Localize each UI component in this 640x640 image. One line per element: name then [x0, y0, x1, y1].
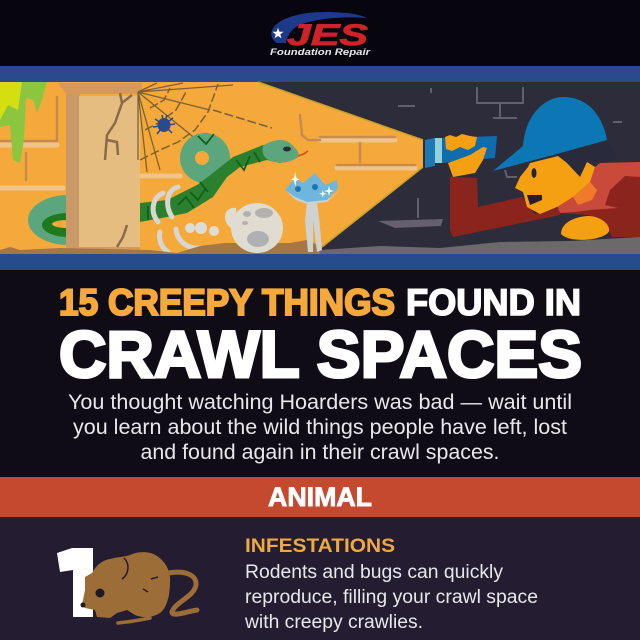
- wooden support post: [58, 83, 142, 251]
- body text: reproduce, filling your crawl space: [245, 587, 538, 608]
- worker collar: [573, 182, 597, 205]
- worker shirt highlight: [557, 162, 640, 213]
- snake tail behind post: [28, 195, 108, 245]
- body text: Rodents and bugs can quickly: [245, 562, 504, 583]
- scene: faint bricks in the dark: [398, 87, 622, 218]
- worker gripping fingers: [445, 134, 477, 151]
- scene: lit bricks: [0, 97, 415, 188]
- worker lower hand: [561, 216, 609, 240]
- banner: bottom blue band: [0, 254, 640, 270]
- banner: top blue band: [0, 66, 640, 82]
- worker shirt: [557, 162, 640, 237]
- scene: stone ledge in the dark: [378, 219, 443, 228]
- illustration banner: [0, 66, 640, 270]
- worker mouth: [527, 195, 542, 205]
- flashlight: [425, 136, 497, 168]
- skull: [225, 203, 283, 253]
- intro text: you learn about the wild things people have left, lost: [73, 416, 567, 439]
- worker palm: [448, 147, 487, 177]
- worker face: [515, 156, 595, 214]
- heading: infestations: INFESTATIONS: [245, 535, 395, 557]
- logo: JES Foundation Repair: JES: [287, 19, 368, 52]
- worker hair: [555, 142, 615, 177]
- crown on a stand with sparkles: [285, 172, 340, 252]
- worker blue hard hat: [493, 97, 607, 171]
- logo: JES Foundation Repair: Foundation Repair: [270, 47, 372, 58]
- intro text: [68, 391, 572, 464]
- skeleton knuckles: [185, 222, 219, 236]
- dirt floor: [0, 240, 322, 254]
- title line two: CRAWL SPACES: [59, 317, 582, 391]
- section header: animal: [0, 477, 640, 517]
- intro text: You thought watching Hoarders was bad — wait until: [68, 391, 572, 414]
- title line one: [59, 282, 581, 323]
- worker eye: [532, 168, 536, 178]
- logo: JES Foundation Repair: [270, 12, 372, 58]
- panel: infestations: [0, 517, 640, 640]
- body text: [244, 562, 538, 633]
- title line one: 15 CREEPY THINGS: [59, 282, 395, 323]
- worker arm: [450, 177, 560, 237]
- scene: dark crawl space background: [0, 82, 640, 254]
- beam edge: [258, 82, 423, 247]
- cobweb and spider: [138, 83, 272, 172]
- number 1: [57, 548, 93, 617]
- icon: brown mouse: [80, 552, 197, 623]
- section header: animal: ANIMAL: [268, 482, 372, 512]
- body text: with creepy crawlies.: [244, 612, 423, 633]
- green snake: [140, 133, 308, 222]
- skeleton hand: [153, 187, 200, 252]
- green slime: [0, 82, 47, 163]
- yellow slime highlight: [0, 82, 22, 120]
- grey floor in the dark: [320, 237, 640, 254]
- flashlight beam: [0, 82, 423, 254]
- title line one: FOUND IN: [406, 282, 581, 323]
- intro text: and found again in their crawl spaces.: [140, 441, 500, 464]
